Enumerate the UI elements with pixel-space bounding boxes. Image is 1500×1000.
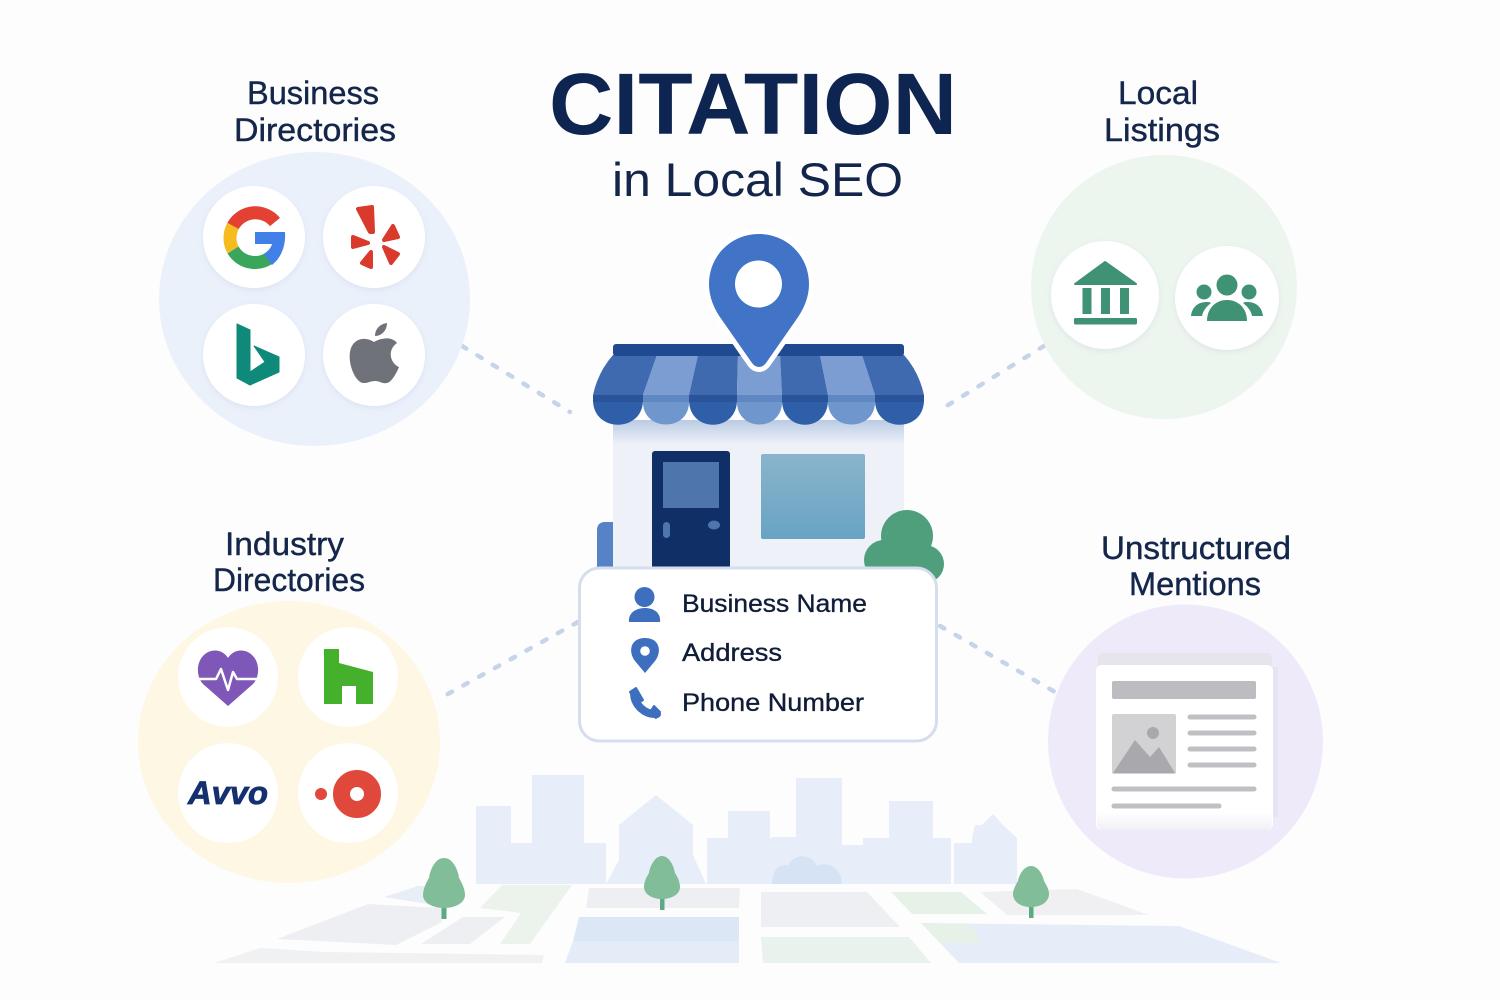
subtitle: in Local SEO [612,153,903,206]
building wall [613,420,904,570]
dotted connector: industry directories [437,622,578,700]
card body [580,568,936,741]
heading: unstructured mentions: Unstructured [1101,530,1291,566]
storefront [593,234,944,583]
icon: opentable [298,743,398,843]
side awning post [597,522,613,568]
awning [593,344,924,425]
icon: google [203,186,305,288]
shop window [761,454,865,539]
city skyline [476,775,1017,884]
green circle [1031,155,1297,419]
heading: business directories: Directories [234,112,396,148]
heading: local listings: Listings [1104,112,1220,148]
bush [864,510,944,583]
heading: local listings: Local [1118,75,1198,111]
dotted connector: unstructured mentions [940,626,1055,692]
heading: unstructured mentions: Mentions [1129,566,1261,602]
panel: local listings [1031,75,1297,419]
yellow circle [138,601,440,883]
icon: person [629,587,660,622]
panel: industry directories [138,526,440,883]
icon: avvo: Avvo [187,775,268,811]
icon: bing [203,304,305,406]
title [549,56,957,206]
dotted connector: business directories [462,346,570,412]
heading: industry directories: Directories [213,562,365,598]
icon: health heart [178,627,278,727]
heading: business directories: Business [247,75,379,111]
heading: local listings [1104,75,1220,148]
icon: yelp [323,186,425,288]
dotted connector: local listings [940,346,1044,410]
tree right [1013,866,1049,918]
street map [214,885,1281,963]
icon: houzz [298,627,398,727]
panel: unstructured mentions [1048,530,1323,878]
label: business name: Business Name [682,590,867,618]
icon: people [1175,246,1279,350]
tree centre [644,856,680,910]
tree left [423,858,465,919]
NAP card [580,568,936,741]
awning top bar [613,344,904,356]
title main: CITATION [549,56,957,153]
icon: courthouse [1051,241,1159,349]
door [652,451,730,570]
icon: article page [1096,653,1278,830]
label: address: Address [682,639,782,667]
panel: business directories [159,75,470,446]
label: phone number: Phone Number [682,689,864,717]
purple circle [1048,604,1323,878]
heading: industry directories: Industry [225,526,344,562]
blue circle [159,152,470,446]
awning scallops [593,395,924,425]
heading: business directories [234,75,396,148]
icon: address pin [631,638,659,673]
icon: apple [323,304,425,406]
location pin [709,234,809,367]
icon: avvo [178,743,278,843]
heading: industry directories [213,526,365,598]
skyline bush [772,856,842,884]
icon: phone [630,688,660,718]
awning shadow [613,420,904,444]
heading: unstructured mentions [1101,530,1291,602]
